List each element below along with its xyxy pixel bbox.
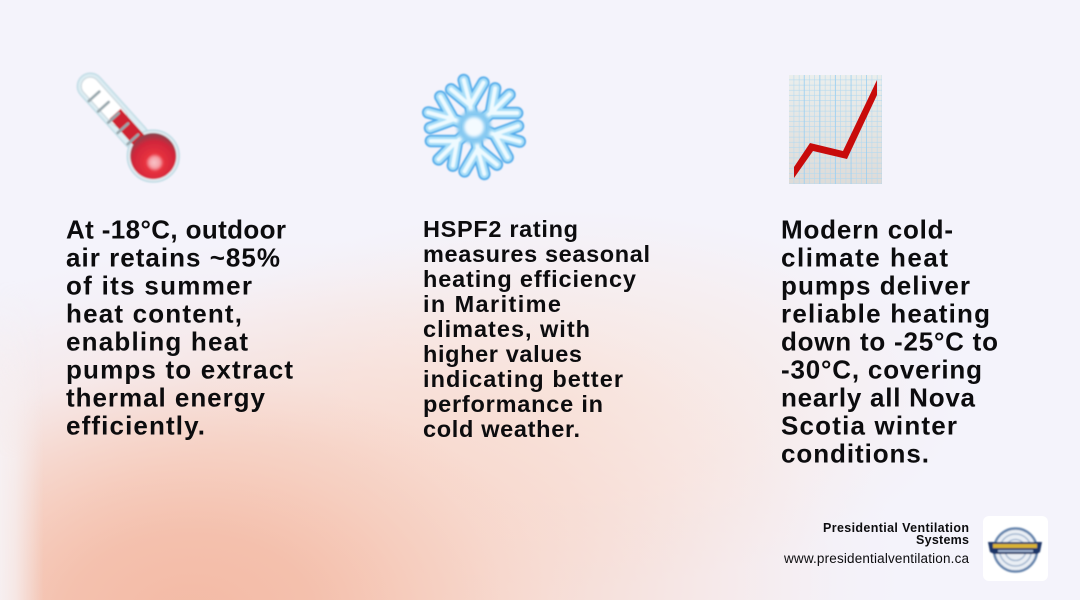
body text: outdoor air <box>66 214 293 440</box>
brand name: Presidential Ventilation <box>823 521 969 535</box>
body text: HSPF2: indicating better <box>423 366 623 392</box>
body text: outdoor air: air retains ~85% <box>66 242 280 272</box>
body text: cold-climate: pumps deliver <box>781 270 970 300</box>
body text: HSPF2: in Maritime <box>423 291 561 317</box>
body text: outdoor air: of its summer <box>66 270 252 300</box>
body text: HSPF2: HSPF2 rating <box>423 216 578 242</box>
body text: cold-climate: reliable heating <box>781 298 990 328</box>
body text: outdoor air: heat content, <box>66 298 242 328</box>
body text: HSPF2: climates, with <box>423 316 590 342</box>
footer: brand <box>783 516 1048 581</box>
panel: HSPF2 rating <box>423 77 650 442</box>
body text: HSPF2: measures seasonal <box>423 241 650 267</box>
body text: cold-climate: Scotia winter <box>781 410 957 440</box>
body text: outdoor air: enabling heat <box>66 326 248 356</box>
icon: snowflake <box>423 77 525 177</box>
body text: cold-climate: climate heat <box>781 242 948 272</box>
body text: HSPF2: performance in <box>423 391 603 417</box>
body text: cold-climate: nearly all Nova <box>781 382 976 412</box>
panel: outdoor air heat content <box>62 59 293 441</box>
body text: HSPF2: heating efficiency <box>423 266 636 292</box>
logo badge <box>983 516 1048 581</box>
body text: cold-climate: down to -25°C to <box>781 326 998 356</box>
body text: cold-climate: conditions. <box>781 438 929 468</box>
icon: rising chart <box>789 75 882 184</box>
body text: HSPF2: higher values <box>423 341 582 367</box>
body text: outdoor air: thermal energy <box>66 382 266 412</box>
brand name <box>823 521 969 547</box>
icon: thermometer <box>62 59 190 193</box>
body text: outdoor air: pumps to extract <box>66 354 293 384</box>
body text: cold-climate: Modern cold- <box>781 214 953 244</box>
body text: outdoor air: efficiently. <box>66 410 205 440</box>
body text: cold-climate <box>781 214 998 468</box>
body text: outdoor air: At -18°C, outdoor <box>66 214 286 244</box>
panel: cold-climate performance <box>781 75 998 468</box>
brand name: Systems <box>916 533 969 547</box>
body text: HSPF2: cold weather. <box>423 416 580 442</box>
body text: cold-climate: -30°C, covering <box>781 354 982 384</box>
body text: HSPF2 <box>423 216 650 442</box>
website: www.presidentialventilation.ca <box>783 551 969 566</box>
